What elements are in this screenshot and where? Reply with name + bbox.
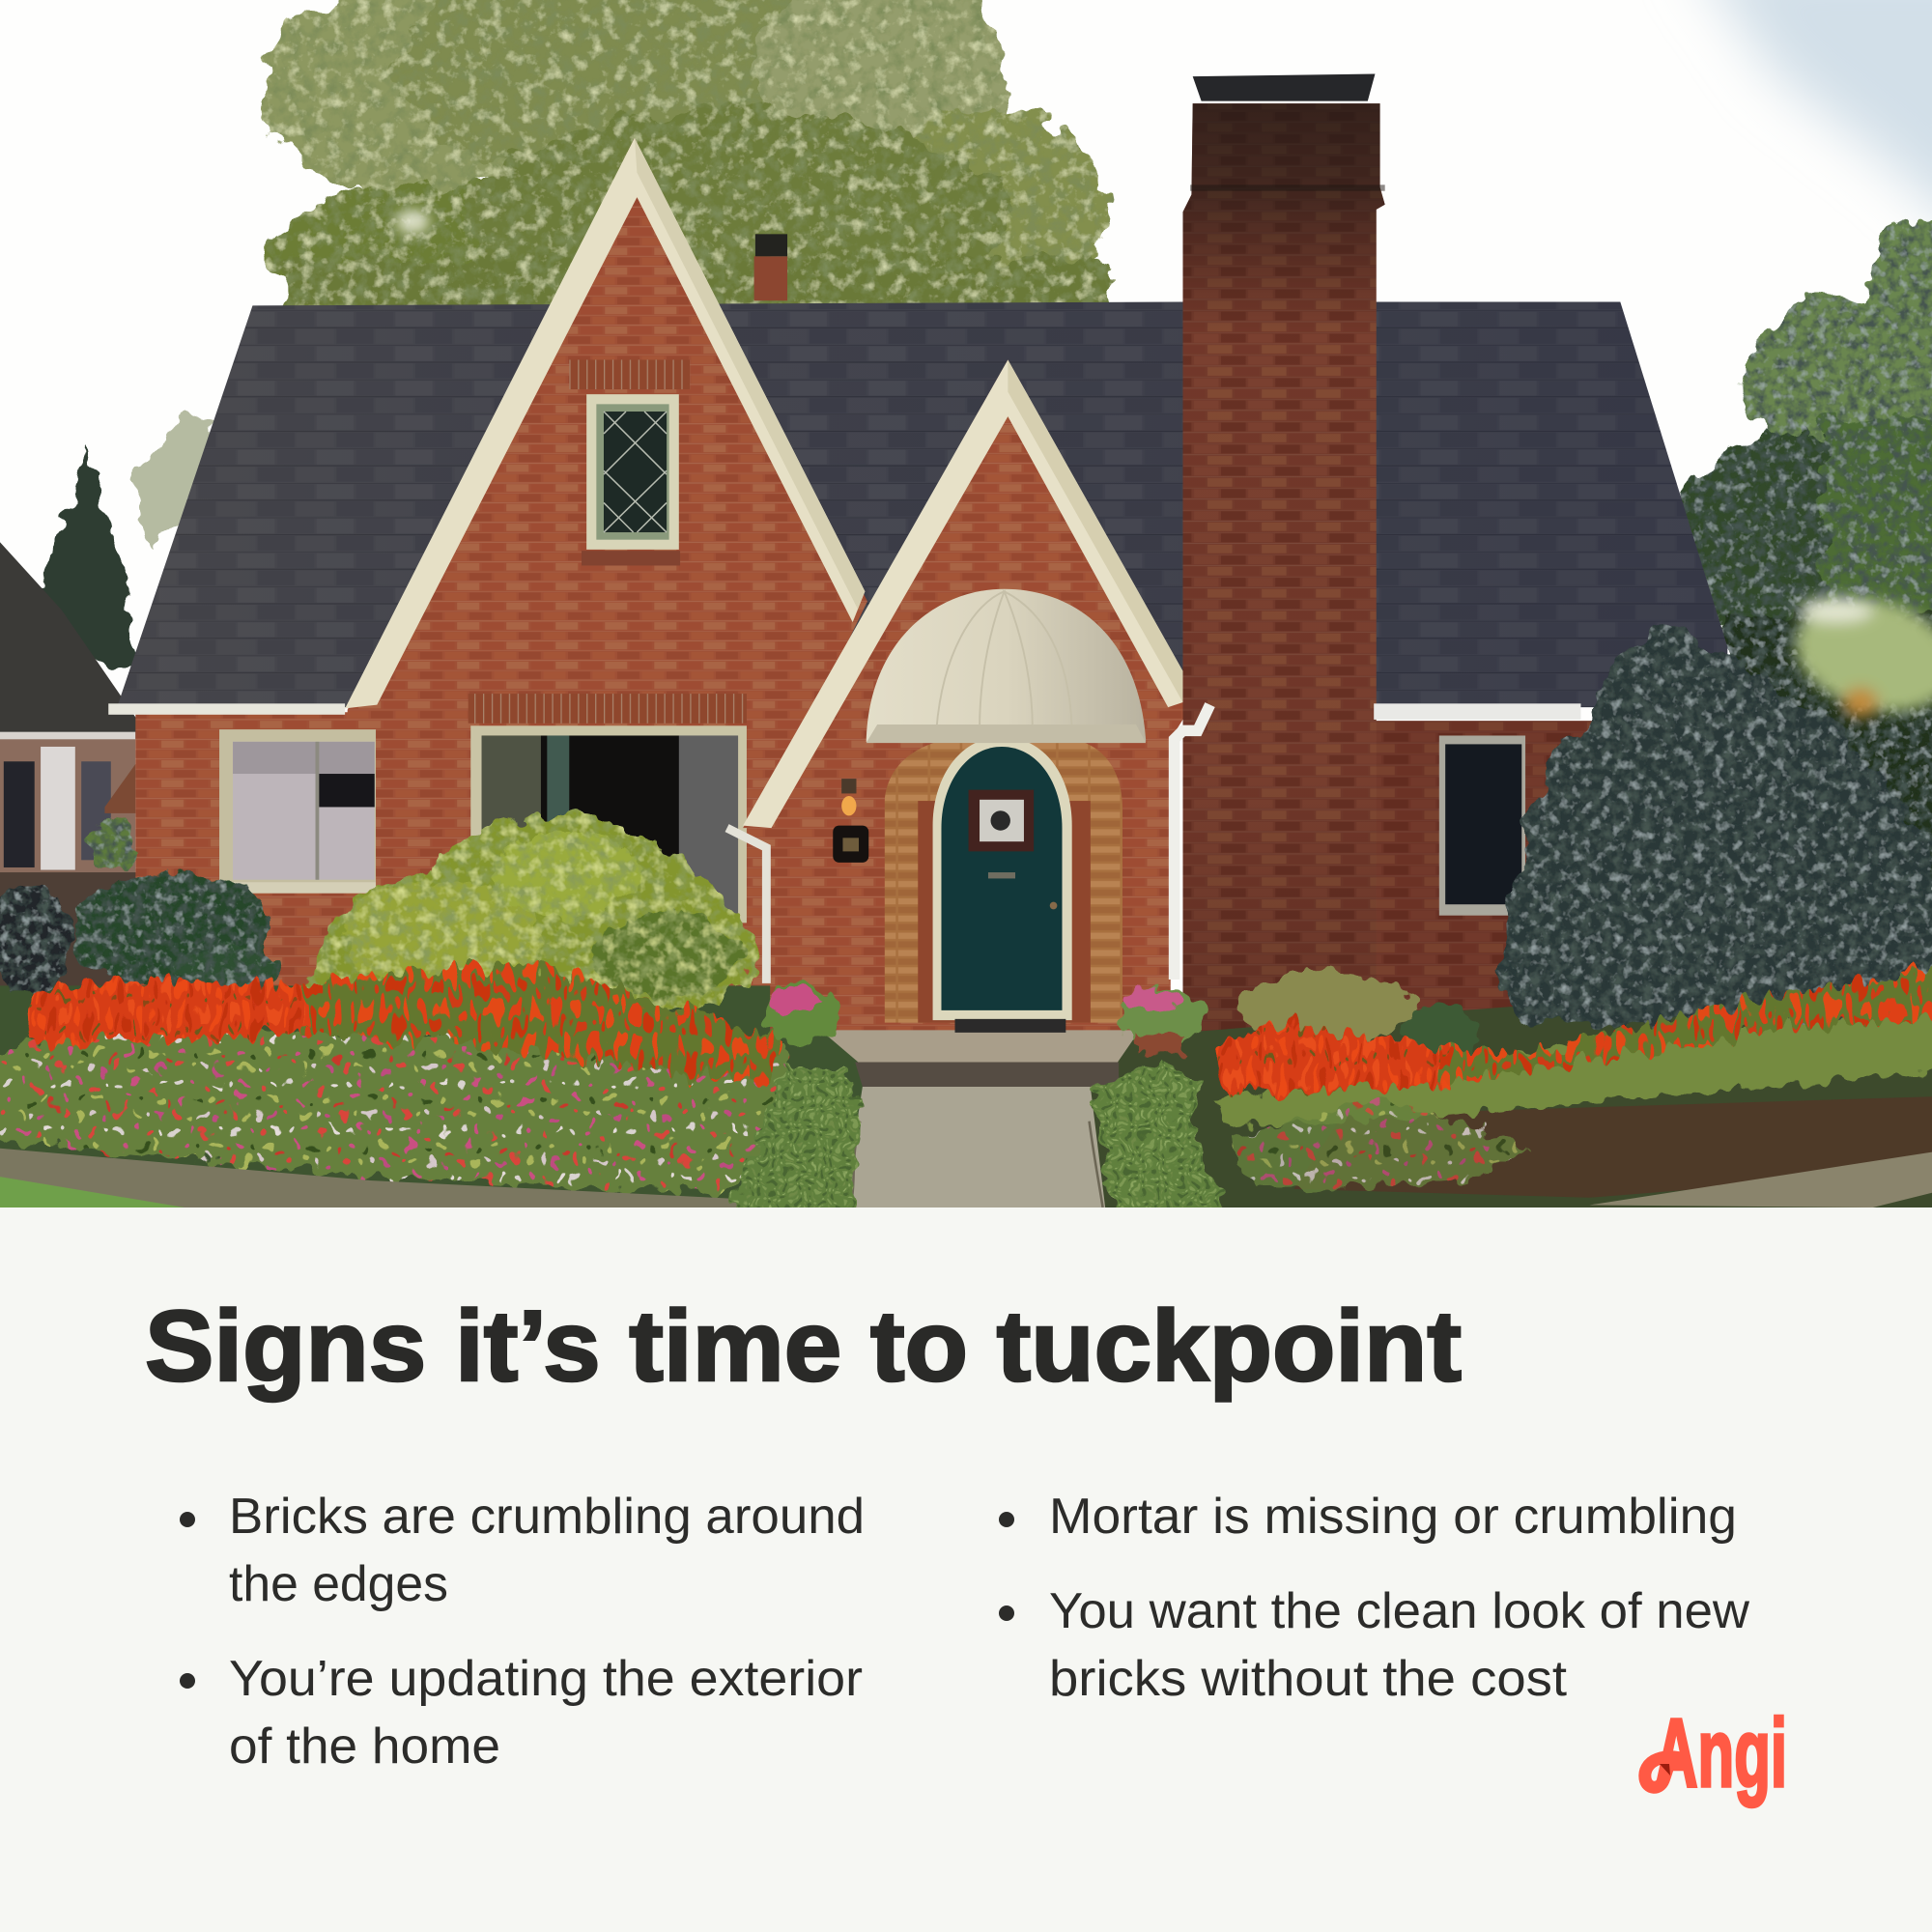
bullet: updating exterior: of the home (229, 1719, 500, 1775)
left column bullet list (180, 1489, 865, 1775)
red salvia flowers left (27, 963, 782, 1084)
bullet: clean look: You want the clean look of new (1049, 1583, 1749, 1639)
heading: Signs it’s time to tuckpoint (145, 1291, 1462, 1403)
entry steps and walkway (820, 1019, 1140, 1208)
bullet: clean look: bricks without the cost (1049, 1651, 1568, 1707)
right shrubs behind flowers (1236, 971, 1479, 1062)
mixed flower bed left (0, 1023, 788, 1193)
left conifer and small tree (37, 412, 215, 671)
stone path and grass (0, 1149, 1932, 1208)
brick walls (135, 712, 1614, 1035)
dark leafy bush right (1497, 628, 1932, 1023)
bullet: crumbling bricks: Bricks are crumbling around (229, 1489, 865, 1545)
bullet: crumbling bricks (180, 1489, 865, 1612)
left window with lace curtains (219, 729, 376, 894)
Angi logo: Angi (1655, 1699, 1787, 1807)
yellow-green central shrub (306, 813, 759, 1035)
attic leaded window (586, 394, 679, 550)
photo: brick house with garden (0, 0, 1932, 1213)
bullet: updating exterior (180, 1651, 863, 1775)
green and red flower band right (1208, 967, 1932, 1189)
bullet: clean look (999, 1583, 1749, 1707)
blurred foreground pine (1782, 582, 1932, 729)
Angi logo (1645, 1699, 1787, 1807)
bullet: updating exterior: You’re updating the exterior (229, 1651, 863, 1707)
front door (933, 737, 1072, 1020)
main gable (108, 138, 867, 764)
front gable (743, 359, 1198, 1035)
chimney (1182, 74, 1385, 1035)
canvas awning (867, 589, 1146, 743)
bullet: missing mortar: Mortar is missing or crumbling (1049, 1489, 1737, 1545)
bullet: crumbling bricks: the edges (229, 1556, 448, 1612)
right dark window (1439, 735, 1525, 916)
right column bullet list (999, 1489, 1749, 1707)
wall lamp and house plaque (833, 779, 868, 863)
right background trees (1676, 222, 1932, 887)
gutters and downspouts (727, 703, 1580, 983)
arched brick door surround (885, 739, 1122, 1023)
soil bed (1293, 1096, 1932, 1198)
roof with shingles (117, 234, 1727, 707)
garden ground base (0, 974, 1932, 1208)
large tree behind house (259, 0, 1109, 321)
left shrubs (0, 819, 277, 996)
boxwood hedges (729, 1057, 1226, 1213)
neighboring house (0, 542, 138, 996)
pink flowers by steps (764, 980, 1205, 1055)
main picture window (470, 725, 747, 923)
sky (0, 0, 1932, 992)
